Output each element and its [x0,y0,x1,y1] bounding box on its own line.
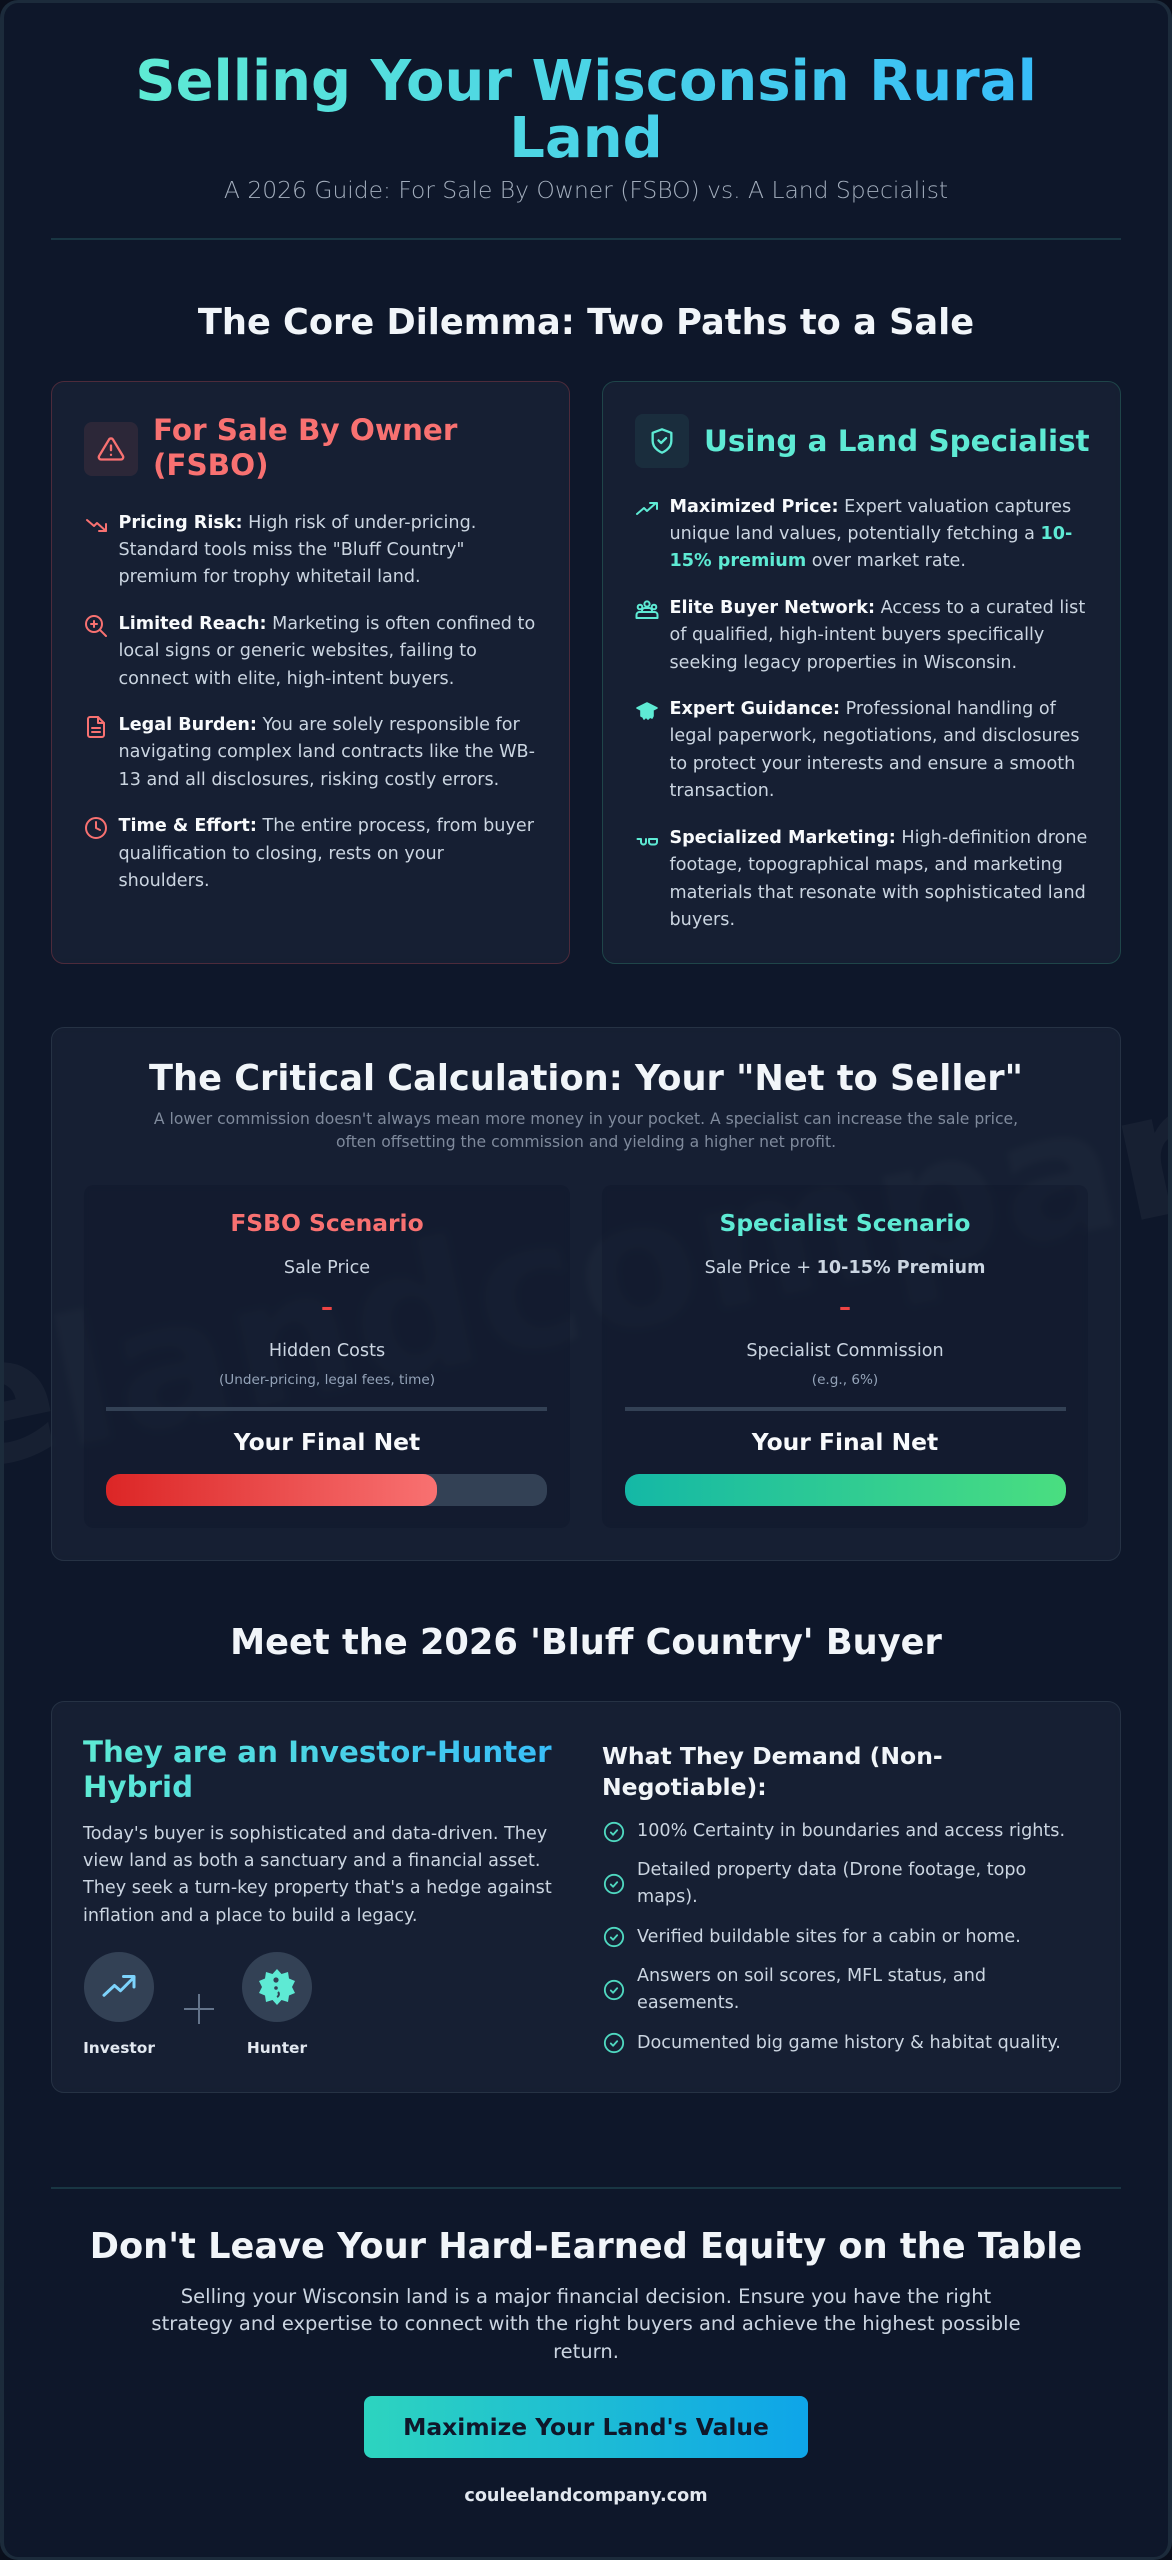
panel: net to seller [51,1027,1121,1561]
text: specialized marketing: Specialized Marketing: High-definition drone [670,828,1087,848]
text: specialized marketing: materials that resonate with sophisticated land [670,883,1086,903]
heading: what they demand [602,1740,943,1803]
text: limited reach: connect with elite, high-intent buyers. [118,669,454,689]
icon: trending down [86,519,107,532]
text: time and effort: qualification to closing, rests on your [118,844,444,864]
heading: final net: Your Final Net [234,1428,420,1456]
button: maximize value [364,2396,808,2458]
item: maximized price [636,496,1072,571]
text: buyer description: inflation and a place to build a legacy. [83,1906,418,1926]
text: soil scores: easements. [637,1993,739,2013]
subtitle: A 2026 Guide: For Sale By Owner (FSBO) vs. A Land Specialist [224,176,948,204]
text: closing paragraph: strategy and expertise to connect with the right buyers and achieve the highest possible [151,2312,1021,2335]
item: expert guidance [635,695,1105,697]
icon: drone [635,828,659,852]
heading: closing call: Don't Leave Your Hard-Earned Equity on the Table [90,2226,1082,2267]
item: legal burden [87,715,535,790]
text: certainty: 100% Certainty in boundaries and access rights. [637,1821,1065,1841]
text: property data: maps). [637,1887,698,1907]
label: investor: Investor [83,2039,155,2057]
list: buyer demands [50,0,52,1]
text: sale price plus premium: Sale Price + 10-15% Premium [705,1258,985,1278]
text: net to seller intro [0,1108,1172,1154]
text: specialist commission: Specialist Commission [746,1341,944,1361]
heading: specialist scenario: Specialist Scenario [719,1209,971,1237]
panel: specialist scenario [602,1185,1088,1528]
icon: hunter [242,1952,312,2022]
footer: website: couleelandcompany.com [464,2486,708,2506]
text: closing paragraph: return. [553,2340,619,2362]
text: soil scores: Answers on soil scores, MFL status, and [637,1966,986,1986]
text: time and effort [118,816,534,891]
text: commission detail: (e.g., 6%) [812,1372,878,1388]
text: expert guidance: Expert Guidance: Professional handling of [670,699,1056,719]
item: buildable sites [602,1924,1122,1951]
text: buildable sites: Verified buildable sites for a cabin or home. [637,1927,1021,1947]
symbol: minus: – [321,1293,333,1321]
item: pricing risk [86,512,476,587]
icon: document [87,716,105,738]
text: specialized marketing [670,825,1087,934]
text: legal burden: navigating complex land contracts like the WB- [118,742,535,762]
symbol: minus: – [839,1293,851,1321]
text: expert guidance: to protect your interests and ensure a smooth [670,754,1075,774]
text: buyer description: They seek a turn-key property that's a hedge against [83,1878,552,1898]
heading: investor-hunter hybrid: Hybrid [83,1770,193,1804]
panel: land specialist [602,381,1121,964]
text: pricing risk [118,512,476,587]
text: sale price: Sale Price [284,1258,370,1278]
bar: FSBO final net 75% [106,1474,547,1506]
heading: FSBO: (FSBO) [153,448,268,482]
text: maximized price [670,496,1072,571]
text: elite buyer network: seeking legacy properties in Wisconsin. [670,653,1017,673]
button: maximize value: Maximize Your Land's Value [403,2413,769,2441]
text: property data [637,1857,1026,1912]
text: limited reach: Limited Reach: Marketing is often confined to [118,614,535,634]
icon: check [603,2032,625,2054]
item: big game history [602,2030,1122,2057]
text: specialized marketing: footage, topographical maps, and marketing [670,855,1063,875]
icon: check [603,1821,625,1843]
item: certainty [602,1818,1122,1845]
text: buyer description: view land as both a sanctuary and a financial asset. [83,1851,540,1871]
icon: warning triangle [84,422,138,476]
text: legal burden: 13 and all disclosures, risking costly errors. [118,770,499,790]
icon: graduation cap [635,699,659,723]
text: pricing risk: Pricing Risk: High risk of under-pricing. [118,512,476,532]
text: pricing risk: premium for trophy whitetail land. [118,567,421,587]
icon: plus [183,1993,215,2025]
item: elite buyer network [636,598,1085,673]
text: expert guidance: legal paperwork, negotiations, and disclosures [670,726,1080,746]
text: time and effort: shoulders. [118,871,210,891]
heading: FSBO: For Sale By Owner [153,413,457,447]
text: hidden costs detail: (Under-pricing, legal fees, time) [219,1372,435,1388]
item: limited reach [85,614,535,689]
icon: check [603,1926,625,1948]
icon: check [603,1873,625,1895]
heading: core dilemma: The Core Dilemma: Two Paths to a Sale [198,302,974,343]
item: specialized marketing [635,824,1105,826]
panel: buyer profile [51,1701,1121,2093]
text: legal burden [118,715,535,790]
title: Selling Your Wisconsin Rural [135,49,1037,114]
text: expert guidance [670,696,1080,806]
item: time and effort [85,816,534,891]
text: specialized marketing: buyers. [670,910,735,930]
heading: what they demand: What They Demand (Non- [602,1742,943,1770]
text: big game history: Documented big game history & habitat quality. [637,2033,1061,2053]
icon: magnifier plus [85,615,107,637]
heading: investor-hunter hybrid: They are an Investor-Hunter [83,1735,552,1769]
label: hunter: Hunter [247,2039,307,2057]
heading: investor-hunter hybrid [83,1735,552,1805]
text: expert guidance: transaction. [670,781,774,801]
text: limited reach [118,614,535,689]
text: maximized price: unique land values, potentially fetching a 10- [670,524,1072,544]
text: net to seller intro: often offsetting the commission and yielding a higher net profit. [336,1133,836,1151]
text: pricing risk: Standard tools miss the "Bluff Country" [118,540,465,560]
heading: net to seller: The Critical Calculation: Your "Net to Seller" [149,1058,1023,1099]
text: legal burden: Legal Burden: You are solely responsible for [118,715,520,735]
heading: what they demand: Negotiable): [602,1773,767,1801]
item: property data [602,1857,1122,1912]
text: hidden costs: Hidden Costs [269,1341,385,1361]
text: elite buyer network [670,595,1085,677]
text: limited reach: local signs or generic websites, failing to [118,641,477,661]
icon: shield check [635,414,689,468]
icon: investor [84,1952,154,2022]
icon: people group [635,598,659,622]
text: time and effort: Time & Effort: The entire process, from buyer [118,816,534,836]
text: elite buyer network: Elite Buyer Network: Access to a curated list [670,598,1085,618]
text: buyer description [83,1820,552,1930]
bar: specialist final net 100% [625,1474,1066,1506]
text: closing paragraph: Selling your Wisconsin land is a major financial decision. Ensure you have the right [181,2284,991,2308]
heading: FSBO scenario: FSBO Scenario [230,1209,424,1237]
text: net to seller intro: A lower commission doesn't always mean more money in your pocket. A specialist can increase the sale price, [154,1110,1018,1128]
title [135,49,1037,171]
icon: clock [85,817,107,839]
text: property data: Detailed property data (Drone footage, topo [637,1860,1026,1880]
heading: FSBO [153,413,458,482]
text: maximized price: 15% premium over market rate. [670,551,966,571]
item: soil scores [602,1963,1122,2017]
text: closing paragraph [0,2282,1172,2365]
heading: bluff country buyer: Meet the 2026 'Bluff Country' Buyer [230,1622,942,1663]
heading: land specialist: Using a Land Specialist [704,424,1090,458]
icon: check [603,1979,625,2001]
text: maximized price: Maximized Price: Expert valuation captures [670,496,1071,516]
text: elite buyer network: of qualified, high-intent buyers specifically [670,625,1044,645]
panel: for sale by owner [51,381,570,964]
heading: final net: Your Final Net [752,1428,938,1456]
panel: FSBO scenario [84,1185,570,1528]
icon: trending up [636,502,658,515]
text: buyer description: Today's buyer is sophisticated and data-driven. They [83,1824,547,1844]
title: Land [509,106,663,171]
text: soil scores [637,1963,986,2017]
